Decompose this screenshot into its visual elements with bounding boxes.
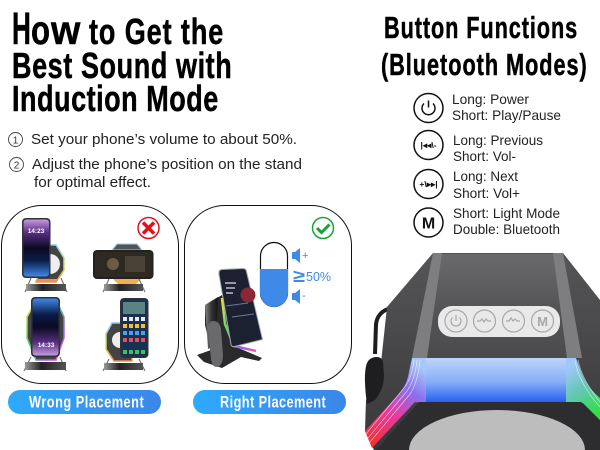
panel: right placement	[184, 206, 352, 384]
speaker button panel: M	[537, 314, 548, 329]
speaker light band right ribbon	[558, 358, 600, 420]
next button row: +\▸▸|	[419, 179, 438, 189]
label pill: right placement: Right Placement	[220, 393, 326, 412]
previous button row: Long: Previous	[453, 132, 543, 148]
phone: portrait offset left on stand: 14:23	[28, 228, 45, 235]
phone: portrait offset right on stand	[103, 298, 148, 371]
mode button row	[414, 205, 560, 237]
title: H	[12, 4, 31, 54]
title: Best Sound with	[12, 45, 232, 86]
title: to Get the	[89, 11, 223, 52]
phone: portrait offset left on stand	[22, 218, 67, 292]
mode button row: Double: Bluetooth	[453, 221, 560, 237]
heading: button functions: (Bluetooth Modes)	[381, 47, 587, 82]
speaker light band left ribbon	[365, 358, 432, 448]
title: Induction Mode	[12, 78, 218, 119]
speaker top face	[412, 254, 577, 358]
heading: button functions	[381, 10, 587, 82]
label pill: wrong placement	[8, 390, 161, 414]
speaker bottom face	[376, 402, 600, 450]
icon: green check	[312, 218, 334, 238]
speaker strap loop	[375, 309, 388, 354]
heading: button functions: Button Functions	[384, 10, 577, 45]
step 2 text: Adjust the phone’s position on the stand	[32, 156, 302, 173]
step 2 text: 2	[14, 160, 20, 172]
speaker button panel	[438, 306, 560, 337]
button list	[414, 91, 561, 237]
phone: upside down on stand	[24, 297, 66, 371]
speaker light band centre	[426, 358, 566, 402]
speaker strap knob	[365, 357, 384, 404]
icon: red cross	[138, 218, 159, 238]
mode button row: M	[422, 216, 435, 232]
power button row: Short: Play/Pause	[452, 107, 561, 123]
power button row	[414, 91, 561, 123]
label pill: wrong placement: Wrong Placement	[29, 393, 144, 412]
volume labels: +	[302, 250, 308, 262]
volume labels	[292, 248, 331, 304]
next button row	[414, 168, 520, 201]
title: w	[50, 8, 81, 53]
volume labels: 50%	[306, 269, 331, 284]
speaker side strips	[412, 253, 582, 358]
previous button row	[414, 130, 543, 164]
speaker product	[365, 253, 600, 450]
stand with phone	[197, 268, 262, 368]
panel: wrong placement	[2, 206, 178, 384]
speaker top body	[365, 253, 600, 450]
step 2 text	[10, 156, 302, 191]
step 1 text: 1	[13, 136, 19, 146]
title	[12, 4, 232, 119]
step 2 text: for optimal effect.	[34, 174, 151, 191]
previous button row: Short: Vol-	[453, 148, 516, 164]
mode button row: Short: Light Mode	[453, 205, 560, 221]
phone: landscape on stand	[93, 244, 154, 292]
phone: upside down on stand: 14:33	[38, 342, 55, 349]
volume labels: -	[302, 290, 306, 302]
speaker silver driver	[409, 410, 585, 450]
title: o	[31, 7, 50, 53]
speaker ribbon stripes	[366, 360, 600, 442]
next button row: Long: Next	[453, 168, 518, 184]
label pill: right placement	[193, 390, 346, 414]
volume level gauge	[260, 242, 288, 307]
step 1 text: Set your phone’s volume to about 50%.	[31, 131, 297, 148]
next button row: Short: Vol+	[453, 185, 520, 201]
volume labels: ≥	[293, 266, 305, 286]
previous button row: |◂◂\-	[420, 140, 437, 150]
power button row: Long: Power	[452, 91, 529, 107]
